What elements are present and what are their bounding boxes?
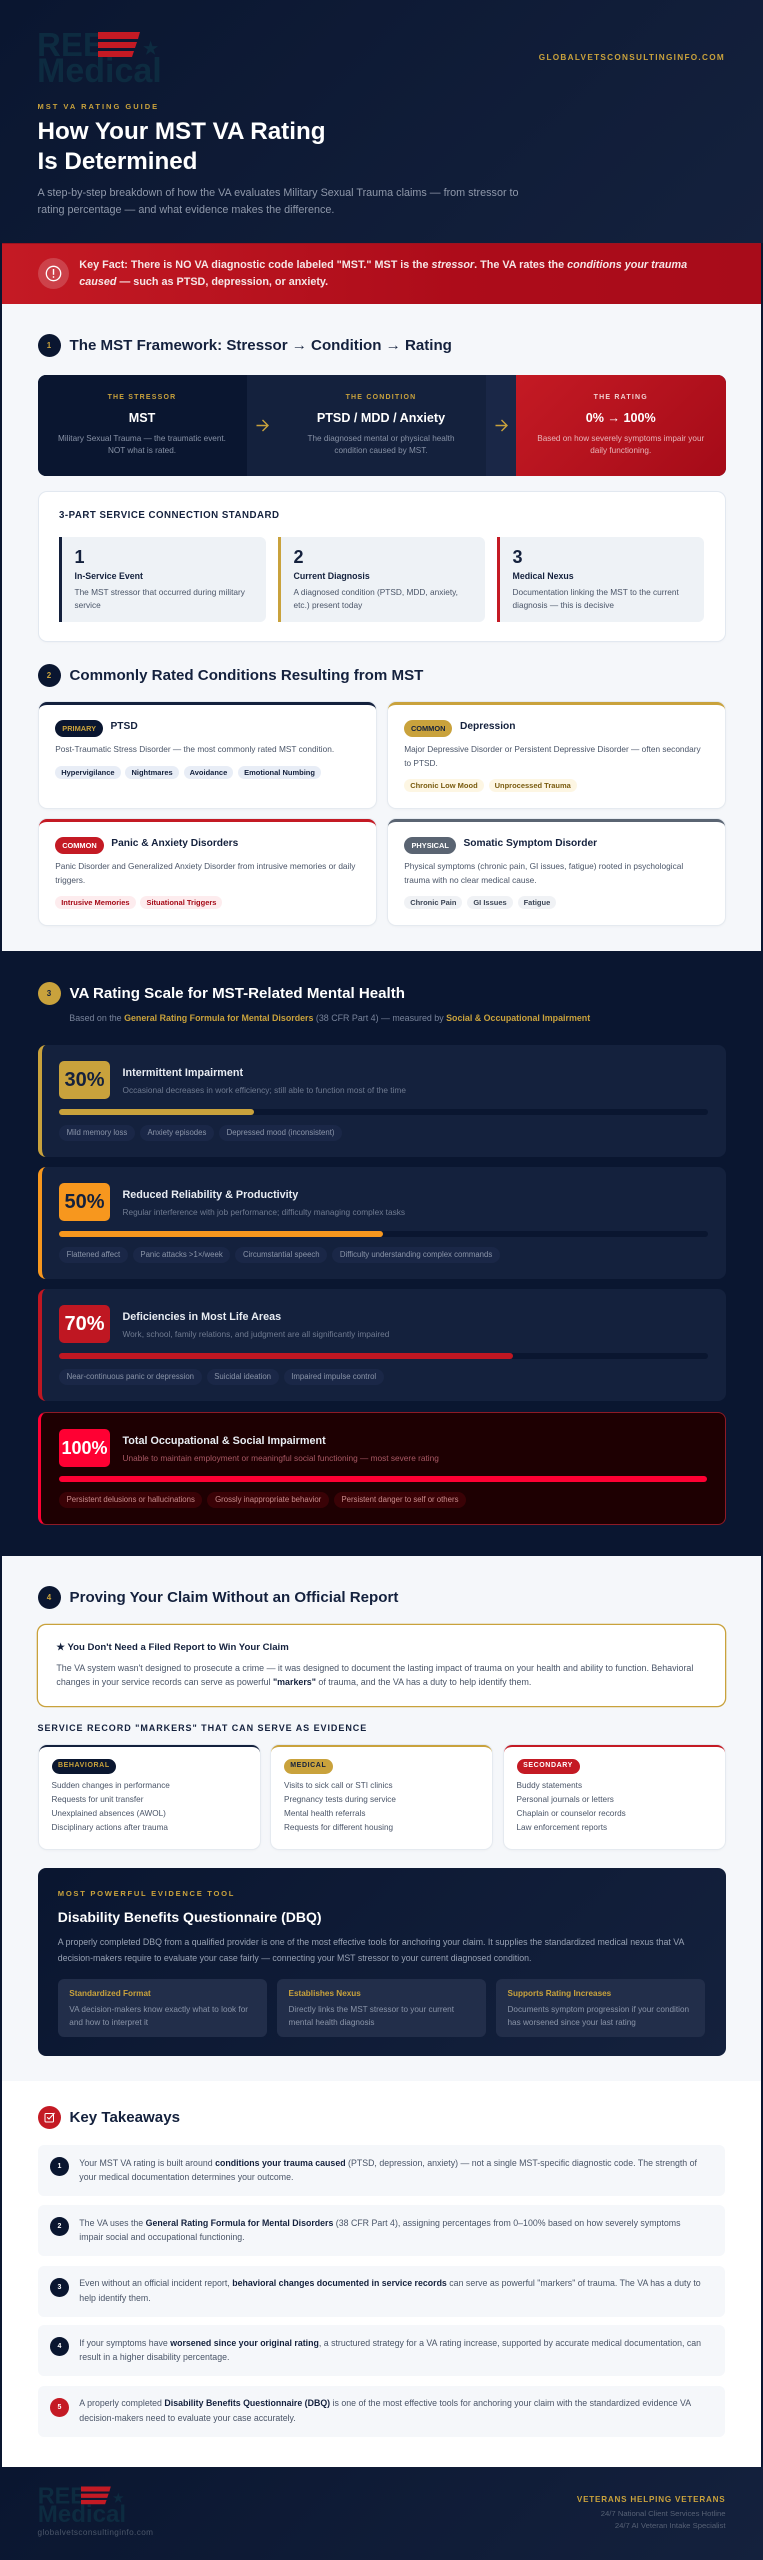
rating card: 70 percent: Work, school, family relations, and judgment are all significantly impaired <box>122 1329 389 1339</box>
arrow segment <box>486 375 516 476</box>
step 2: A diagnosed condition (PTSD, MDD, anxiety, <box>294 587 458 597</box>
rating card: 50 percent <box>38 1167 726 1279</box>
marker card: medical: Mental health referrals <box>284 1809 365 1818</box>
rating card: 50 percent: Regular interference with job performance; difficulty managing complex tasks <box>122 1207 405 1217</box>
heading 2 <box>38 664 424 687</box>
card: PTSD: Emotional Numbing <box>244 768 315 777</box>
section: key takeaways <box>0 2081 763 2467</box>
callout text: The VA system wasn't designed to prosecute a crime — it was designed to document the lasting impact of trauma on your health and ability to function. Behavioral <box>56 1663 693 1673</box>
heading 3: VA Rating Scale for MST-Related Mental Health <box>70 984 405 1002</box>
rating card: 100 percent: Grossly inappropriate behavior <box>215 1495 321 1504</box>
heading 1: 1 <box>47 340 51 350</box>
step 3: diagnosis — this is decisive <box>512 600 614 610</box>
heading 2: 2 <box>47 670 51 680</box>
panel: rating: Based on how severely symptoms impair your <box>537 434 704 443</box>
card: panic and anxiety: Situational Triggers <box>146 898 216 907</box>
takeaway 3 <box>38 2266 725 2317</box>
rating card: 50 percent: 50% <box>64 1191 105 1213</box>
rating card: 50 percent: Difficulty understanding complex commands <box>340 1250 492 1259</box>
footer tagline: VETERANS HELPING VETERANS <box>577 2495 726 2504</box>
step 3: 3 <box>512 547 523 567</box>
marker card: behavioral: Sudden changes in performance <box>52 1781 170 1790</box>
takeaway 5 <box>38 2386 725 2437</box>
rating card: 100 percent: Persistent danger to self or others <box>341 1495 458 1504</box>
heading 2: Commonly Rated Conditions Resulting from MST <box>70 666 423 684</box>
card: PTSD: Post-Traumatic Stress Disorder — the most commonly rated MST condition. <box>55 744 334 754</box>
takeaway 2: The VA uses the General Rating Formula for Mental Disorders (38 CFR Part 4), assigning percentages from 0–100% based on how severely symptoms <box>79 2218 680 2228</box>
title: Is Determined <box>38 148 197 174</box>
footer <box>0 2467 763 2560</box>
panel: rating: 0% → 100% <box>586 411 656 425</box>
card: PTSD: Avoidance <box>190 768 227 777</box>
marker card: medical <box>271 1745 492 1849</box>
logo: ★ <box>143 39 159 58</box>
callout text: changes in your service records can serve as powerful "markers" of trauma, and the VA has a duty to help identify them. <box>56 1677 531 1687</box>
header <box>0 0 763 243</box>
heading 1: The MST Framework: Stressor → Condition → Rating <box>70 336 452 354</box>
panel: condition: THE CONDITION <box>346 394 416 401</box>
step 3: Medical Nexus <box>512 571 574 581</box>
heading 3 <box>38 982 405 1005</box>
rating card: 30 percent: Mild memory loss <box>67 1128 127 1137</box>
marker card: medical: MEDICAL <box>290 1762 326 1769</box>
card: depression: Chronic Low Mood <box>410 781 478 790</box>
panel: condition: condition caused by MST. <box>334 446 428 455</box>
footer services: 24/7 AI Veteran Intake Specialist <box>615 2521 726 2530</box>
rating card: 30 percent: Depressed mood (inconsistent) <box>227 1128 334 1137</box>
card: somatic: Somatic Symptom Disorder <box>464 838 597 849</box>
card: depression: COMMON <box>411 724 445 733</box>
footer logo: ★ <box>112 2491 123 2505</box>
framework flow <box>38 375 726 476</box>
rating card: 50 percent: Reduced Reliability & Productivity <box>122 1189 298 1201</box>
rating card: 30 percent: Anxiety episodes <box>147 1128 206 1137</box>
card: somatic: Chronic Pain <box>410 898 456 907</box>
DBQ title: Disability Benefits Questionnaire (DBQ) <box>58 1909 322 1925</box>
panel: rating <box>516 375 726 476</box>
panel: 3-part standard <box>38 492 725 641</box>
card: depression: Unprocessed Trauma <box>495 781 571 790</box>
takeaway 2: 2 <box>58 2223 61 2230</box>
DBQ card: increases: Supports Rating Increases <box>508 1989 611 1998</box>
takeaway 5: 5 <box>58 2404 61 2411</box>
DBQ card: nexus: Directly links the MST stressor to your current <box>288 2004 454 2014</box>
rating card: 50 percent: Panic attacks >1×/week <box>140 1250 223 1259</box>
marker card: behavioral: Disciplinary actions after trauma <box>52 1823 168 1832</box>
step 3 <box>497 537 704 622</box>
footer services: 24/7 National Client Services Hotline <box>601 2509 726 2518</box>
step 3: Documentation linking the MST to the current <box>512 587 679 597</box>
card: panic and anxiety: COMMON <box>62 841 97 850</box>
step 1: service <box>74 600 101 610</box>
step 1: In-Service Event <box>74 571 143 581</box>
heading 4: Proving Your Claim Without an Official Report <box>70 1589 398 1606</box>
standard heading: 3-PART SERVICE CONNECTION STANDARD <box>59 510 279 521</box>
panel: stressor: MST <box>129 411 155 425</box>
takeaway 3: 3 <box>58 2284 61 2291</box>
key fact text <box>79 258 687 288</box>
marker card: secondary: Chaplain or counselor records <box>516 1809 626 1818</box>
heading 3: 3 <box>47 988 51 998</box>
takeaway 4: result in a higher disability percentage. <box>79 2352 229 2362</box>
callout title: ★ You Don't Need a Filed Report to Win Your Claim <box>56 1642 289 1653</box>
panel: rating: daily functioning. <box>590 446 651 455</box>
card: depression: Major Depressive Disorder or Persistent Depressive Disorder — often secondary <box>404 744 701 754</box>
takeaways heading <box>38 2106 180 2129</box>
footer logo <box>37 2485 124 2525</box>
card: panic and anxiety: Intrusive Memories <box>61 898 130 907</box>
DBQ card: format <box>58 1979 267 2037</box>
marker card: secondary: Buddy statements <box>516 1781 582 1790</box>
rating card: 30 percent: Intermittent Impairment <box>122 1067 243 1079</box>
takeaway 5: A properly completed Disability Benefits Questionnaire (DBQ) is one of the most effective tools for anchoring your claim with the standardized evidence VA <box>79 2398 691 2408</box>
card: panic and anxiety <box>38 819 376 925</box>
takeaway 3: Even without an official incident report, behavioral changes documented in service records can serve as powerful "markers" of trauma. The VA has a duty to <box>79 2278 701 2288</box>
card: PTSD <box>38 702 376 808</box>
card: depression: to PTSD. <box>404 758 438 768</box>
rating card: 70 percent: Impaired impulse control <box>291 1372 376 1381</box>
rating card: 30 percent: 30% <box>64 1069 105 1091</box>
card: depression: Depression <box>460 721 515 732</box>
marker card: medical: Pregnancy tests during service <box>284 1795 396 1804</box>
key fact text: Key Fact: There is NO VA diagnostic code labeled "MST." MST is the stressor. The VA rates the conditions your trauma <box>79 258 687 270</box>
card: PTSD: PTSD <box>110 721 138 732</box>
arrow <box>496 420 508 432</box>
step 1 <box>59 537 266 622</box>
marker card: behavioral: Unexplained absences (AWOL) <box>52 1809 166 1818</box>
section: proving your claim <box>0 1556 763 2081</box>
panel: condition <box>307 394 454 455</box>
panel: condition: The diagnosed mental or physical health <box>307 434 454 443</box>
rating card: 70 percent: 70% <box>64 1313 105 1335</box>
heading 1 <box>38 334 452 357</box>
rating card: 70 percent: Deficiencies in Most Life Areas <box>122 1311 281 1323</box>
panel: stressor: NOT what is rated. <box>108 446 176 455</box>
card: somatic: PHYSICAL <box>412 841 449 850</box>
subtitle <box>38 187 519 216</box>
marker card: behavioral: BEHAVIORAL <box>58 1762 110 1769</box>
step 1: 1 <box>74 547 85 567</box>
DBQ card: nexus <box>277 1979 486 2037</box>
panel: stressor <box>38 375 246 476</box>
DBQ card: format: Standardized Format <box>69 1989 151 1998</box>
card: panic and anxiety: Panic & Anxiety Disorders <box>111 838 238 849</box>
DBQ text: decision-makers require to evaluate your case fairly — connecting your MST stressor to your current diagnosed condition. <box>58 1953 531 1963</box>
title: How Your MST VA Rating <box>38 118 326 145</box>
panel: rating: THE RATING <box>594 394 648 401</box>
section: rating scale <box>0 951 763 1556</box>
logo <box>37 30 160 86</box>
key fact banner <box>2 243 761 304</box>
website url: GLOBALVETSCONSULTINGINFO.COM <box>539 53 725 62</box>
rating card: 50 percent: Circumstantial speech <box>243 1250 320 1259</box>
takeaway 3: help identify them. <box>79 2293 151 2303</box>
DBQ card: format: and how to interpret it <box>69 2018 148 2026</box>
step 2: 2 <box>294 547 304 567</box>
rating card: 70 percent <box>38 1289 726 1401</box>
DBQ card: format: VA decision-makers know exactly what to look for <box>69 2004 248 2014</box>
card: somatic <box>388 819 724 925</box>
rating card: 100 percent <box>38 1412 726 1525</box>
subtitle: rating percentage — and what evidence makes the difference. <box>38 204 334 216</box>
panel: stressor: Military Sexual Trauma — the traumatic event. <box>58 434 226 443</box>
takeaway 4 <box>38 2325 725 2376</box>
callout <box>38 1625 725 1706</box>
card: somatic: Physical symptoms (chronic pain, GI issues, fatigue) rooted in psychological <box>404 861 683 871</box>
marker card: secondary: SECONDARY <box>523 1762 573 1769</box>
takeaway 2: impair social and occupational functioning. <box>79 2232 245 2242</box>
step 1: The MST stressor that occurred during military <box>74 587 245 597</box>
section: framework and conditions <box>0 304 763 951</box>
step 2: etc.) present today <box>294 600 362 610</box>
DBQ card: increases: Documents symptom progression if your condition <box>508 2004 689 2014</box>
card: depression <box>388 702 724 808</box>
card: somatic: GI Issues <box>473 898 507 907</box>
takeaways heading: Key Takeaways <box>70 2108 180 2126</box>
DBQ card: increases: has worsened since your last rating <box>508 2018 636 2026</box>
heading 4: 4 <box>47 1593 51 1602</box>
marker card: behavioral <box>38 1745 260 1849</box>
DBQ panel <box>38 1868 726 2056</box>
marker card: medical: Visits to sick call or STI clinics <box>284 1781 393 1790</box>
footer url: globalvetsconsultinginfo.com <box>38 2528 153 2537</box>
step 2: Current Diagnosis <box>294 571 370 581</box>
footer services <box>601 2509 726 2530</box>
takeaway 4: 4 <box>58 2343 61 2350</box>
card: PTSD: Hypervigilance <box>61 768 115 777</box>
DBQ card: increases <box>496 1979 705 2037</box>
rating card: 30 percent: Occasional decreases in work efficiency; still able to function most of the time <box>122 1085 406 1095</box>
takeaway 4: If your symptoms have worsened since your original rating, a structured strategy for a VA rating increase, supported by accurate medical documentation, can <box>79 2338 701 2348</box>
DBQ text <box>58 1937 684 1963</box>
rating card: 50 percent: Flattened affect <box>67 1250 120 1259</box>
rating card: 70 percent: Near-continuous panic or depression <box>67 1372 194 1381</box>
marker card: medical: Requests for different housing <box>284 1823 393 1832</box>
card: panic and anxiety: Panic Disorder and Generalized Anxiety Disorder from intrusive memories or daily <box>55 861 355 871</box>
card: PTSD: Nightmares <box>131 768 173 777</box>
takeaway 1 <box>38 2145 725 2196</box>
marker card: secondary: Personal journals or letters <box>516 1795 614 1804</box>
arrow <box>256 420 269 432</box>
rating card: 100 percent: Unable to maintain employment or meaningful social functioning — most severe rating <box>122 1453 439 1463</box>
takeaway 1: 1 <box>58 2163 61 2170</box>
DBQ card: nexus: Establishes Nexus <box>288 1989 361 1998</box>
step 2 <box>278 537 485 622</box>
DBQ text: A properly completed DBQ from a qualified provider is one of the most effective tools for anchoring your claim. It supplies the standardized medical nexus that VA <box>58 1937 684 1947</box>
subtitle: A step-by-step breakdown of how the VA evaluates Military Sexual Trauma claims — from stressor to <box>38 187 519 199</box>
card: somatic: trauma with no clear medical cause. <box>404 875 537 885</box>
DBQ eyebrow: MOST POWERFUL EVIDENCE TOOL <box>58 1889 235 1898</box>
rating subtitle: Based on the General Rating Formula for Mental Disorders (38 CFR Part 4) — measured by Social & Occupational Impairment <box>69 1012 590 1022</box>
rating card: 100 percent: Persistent delusions or hallucinations <box>67 1495 195 1504</box>
rating card: 100 percent: 100% <box>61 1438 108 1458</box>
key fact text: caused — such as PTSD, depression, or anxiety. <box>79 276 328 288</box>
heading 4 <box>38 1586 398 1609</box>
takeaway 1: Your MST VA rating is built around conditions your trauma caused (PTSD, depression, anxiety) — not a single MST-specific diagnostic code. The strength of <box>79 2158 697 2168</box>
markers heading: SERVICE RECORD "MARKERS" THAT CAN SERVE AS EVIDENCE <box>38 1723 367 1733</box>
title <box>38 118 326 174</box>
card: somatic: Fatigue <box>524 898 550 907</box>
rating card: 30 percent <box>38 1045 726 1157</box>
marker card: secondary: Law enforcement reports <box>516 1823 607 1832</box>
icon: alert <box>38 258 69 289</box>
panel: condition: PTSD / MDD / Anxiety <box>317 411 445 425</box>
marker card: behavioral: Requests for unit transfer <box>52 1795 143 1804</box>
panel: stressor: THE STRESSOR <box>108 394 176 401</box>
card: panic and anxiety: triggers. <box>55 875 85 885</box>
takeaway 5: decision-makers need to evaluate your case accurately. <box>79 2413 296 2423</box>
DBQ card: nexus: mental health diagnosis <box>288 2018 375 2026</box>
takeaway 2 <box>38 2205 725 2256</box>
marker card: secondary <box>504 1745 724 1849</box>
rating card: 100 percent: Total Occupational & Social Impairment <box>122 1435 326 1447</box>
callout text <box>56 1663 693 1687</box>
card: PTSD: PRIMARY <box>62 724 96 733</box>
takeaway 1: your medical documentation determines your outcome. <box>79 2172 293 2182</box>
eyebrow: MST VA RATING GUIDE <box>38 102 159 111</box>
rating card: 70 percent: Suicidal ideation <box>214 1372 271 1381</box>
